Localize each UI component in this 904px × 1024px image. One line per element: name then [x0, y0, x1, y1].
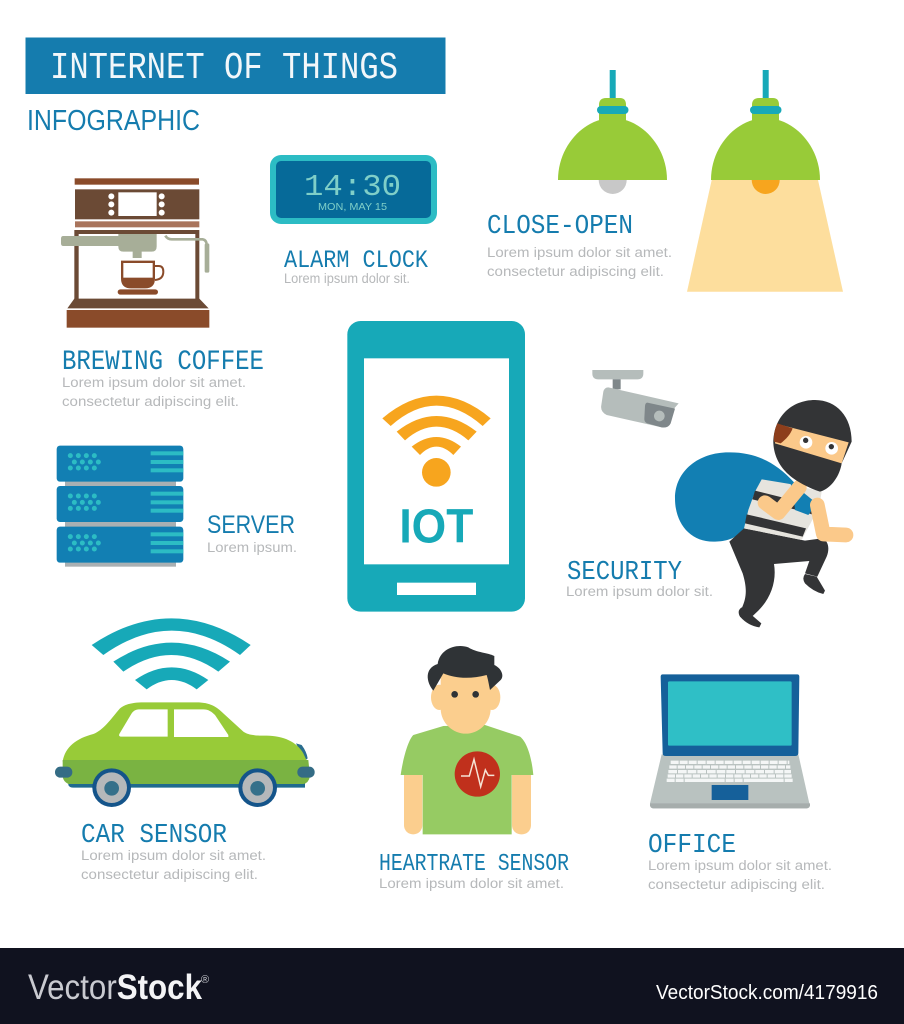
label: server: SERVER [207, 511, 295, 539]
label: office [648, 831, 832, 892]
label: heartrate sensor [379, 851, 569, 891]
footer bar: ® [201, 974, 209, 986]
icon: lamp on [687, 70, 843, 292]
title banner: INTERNET OF THINGS [50, 47, 398, 90]
label: close-open [487, 212, 672, 279]
footer bar [0, 948, 904, 1024]
icon: laptop [650, 674, 810, 808]
footer bar: VectorStock [28, 968, 202, 1007]
label: car sensor: Lorem ipsum dolor sit amet. [81, 848, 266, 863]
icon: smartphone with wifi [347, 321, 525, 612]
label: brewing coffee: Lorem ipsum dolor sit amet. [62, 375, 246, 390]
label: brewing coffee: BREWING COFFEE [62, 347, 264, 378]
icon: alarm clock: 14:30 [304, 170, 401, 205]
illustration: thief with sack [675, 400, 852, 627]
footer bar: VectorStock.com/4179916 [656, 982, 878, 1004]
icon: alarm clock [270, 155, 437, 224]
label: heartrate sensor: Lorem ipsum dolor sit amet. [379, 876, 564, 891]
label: close-open: consectetur adipiscing elit. [487, 264, 664, 279]
label: security [566, 558, 713, 599]
label: alarm clock: ALARM CLOCK [284, 246, 428, 275]
label: security: SECURITY [567, 558, 682, 588]
label: car sensor: CAR SENSOR [81, 821, 227, 851]
title banner [26, 38, 446, 94]
label: brewing coffee [62, 347, 264, 409]
illustration: man with heart-rate badge [401, 646, 533, 834]
label: close-open: Lorem ipsum dolor sit amet. [487, 245, 672, 260]
label: office: Lorem ipsum dolor sit amet. [648, 858, 832, 873]
label: close-open: CLOSE-OPEN [487, 212, 633, 242]
icon: security camera [592, 370, 679, 427]
icon: alarm clock: MON, MAY 15 [318, 201, 387, 213]
label: alarm clock [284, 246, 428, 286]
label: heartrate sensor: HEARTRATE SENSOR [379, 851, 569, 878]
label: brewing coffee: consectetur adipiscing elit. [62, 394, 239, 409]
label: car sensor [81, 821, 266, 882]
icon: server rack [57, 446, 183, 567]
icon: lamp off [558, 70, 667, 194]
label: car sensor: consectetur adipiscing elit. [81, 867, 258, 882]
label: alarm clock: Lorem ipsum dolor sit. [284, 271, 410, 286]
label: security: Lorem ipsum dolor sit. [566, 584, 713, 599]
label: office: OFFICE [648, 831, 736, 861]
label: office: consectetur adipiscing elit. [648, 877, 825, 892]
subtitle: INFOGRAPHIC [27, 105, 200, 137]
icon: car with wifi signal [55, 618, 315, 807]
label: server [207, 511, 297, 555]
label: server: Lorem ipsum. [207, 540, 297, 555]
icon: coffee machine [61, 178, 209, 328]
icon: smartphone with wifi: IOT [399, 499, 474, 553]
